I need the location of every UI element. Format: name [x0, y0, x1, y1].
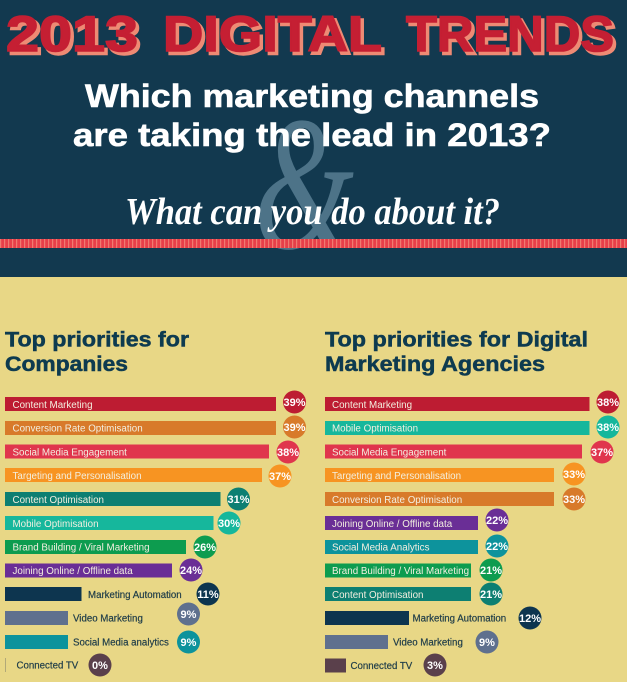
bar: connected tv 3%	[325, 654, 446, 676]
heading: agencies: Top priorities for Digital	[325, 328, 588, 352]
bar: content optimisation 21%: 21%	[480, 589, 502, 601]
heading: question: Which marketing channels	[85, 78, 539, 114]
bar: conversion rate optimisation 33%: 33%	[563, 494, 585, 506]
subheading: script question: What can you do about it?	[125, 191, 500, 233]
bar: mobile optimisation 38%: Mobile Optimisation	[332, 424, 418, 434]
bar: video marketing 9%	[325, 630, 498, 654]
bar: joining online offline 22%: Joining Online / Offline data	[332, 519, 453, 530]
bar: content marketing 39%	[5, 390, 306, 414]
bar: content optimisation 31%: 31%	[227, 494, 250, 506]
bar: video marketing 9%: 9%	[181, 609, 197, 621]
title: DIGITAL	[166, 9, 385, 65]
title: TRENDS	[409, 9, 617, 65]
bar: video marketing 9%	[5, 602, 200, 626]
bar: content optimisation 31%	[5, 488, 250, 510]
bar: brand building 26%	[5, 536, 216, 558]
bar: targeting and personalisation 33%: Targeting and Personalisation	[332, 471, 461, 482]
bar: social media engagement 38%: Social Media Engagement	[12, 448, 127, 458]
bar: joining online offline 22%: 22%	[486, 515, 508, 527]
bar: connected tv 0%	[5, 654, 112, 676]
bar: joining online offline 24%	[5, 558, 202, 582]
bar: social media analytics 9%: Social Media analytics	[73, 638, 169, 648]
title: 2013	[6, 6, 138, 62]
bar: social media engagement 37%	[325, 440, 614, 464]
bar: connected tv 3%: 3%	[427, 660, 443, 672]
heading: question: are taking the lead in 2013?	[73, 117, 551, 153]
bar: mobile optimisation 30%: Mobile Optimisation	[12, 519, 99, 530]
bar: targeting and personalisation 33%	[325, 462, 586, 486]
bar: targeting and personalisation 37%: Targeting and Personalisation	[12, 471, 142, 482]
bar: marketing automation 11%: Marketing Automation	[88, 590, 182, 601]
bar: joining online offline 24%: Joining Online / Offline data	[12, 566, 133, 577]
heading: agencies	[325, 328, 588, 376]
bar: conversion rate optimisation 39%: Conversion Rate Optimisation	[12, 424, 143, 434]
bar: marketing automation 11%	[5, 582, 220, 606]
bar: marketing automation 12%: Marketing Automation	[412, 614, 506, 624]
title: 2013	[9, 9, 141, 65]
panel: header background	[0, 0, 627, 277]
bar: social media analytics 22%: Social Media Analytics	[332, 542, 430, 554]
bar: brand building 26%: 26%	[194, 542, 216, 554]
bar: social media engagement 37%: Social Media Engagement	[332, 448, 447, 458]
title: TRENDS	[406, 6, 614, 62]
bar: joining online offline 24%: 24%	[180, 565, 202, 577]
bar: connected tv 0%: 0%	[92, 660, 108, 672]
heading: companies: Top priorities for	[5, 328, 189, 352]
bar: mobile optimisation 38%: 38%	[597, 422, 619, 434]
bar: connected tv 3%: Connected TV	[350, 661, 413, 672]
bar: social media analytics 22%: 22%	[486, 541, 508, 553]
bar: conversion rate optimisation 39%: 39%	[283, 422, 306, 434]
bar: targeting and personalisation 37%: 37%	[269, 471, 291, 483]
heading: agencies: Marketing Agencies	[325, 353, 545, 376]
bar: social media analytics 22%	[325, 534, 508, 558]
bar: marketing automation 12%	[325, 606, 542, 630]
bar: video marketing 9%: Video Marketing	[393, 638, 463, 648]
bar: marketing automation 12%: 12%	[519, 613, 541, 625]
bar: content optimisation 21%: Content Optimisation	[332, 590, 423, 601]
heading: companies: Companies	[5, 353, 128, 376]
title: DIGITAL	[163, 6, 382, 62]
bar: social media analytics 9%: 9%	[181, 637, 197, 649]
bar: mobile optimisation 30%	[5, 512, 240, 534]
bar: targeting and personalisation 33%: 33%	[563, 469, 585, 481]
bar: content optimisation 21%	[325, 582, 502, 606]
bar: social media engagement 38%: 38%	[277, 447, 299, 459]
icon: large ampersand: &	[254, 77, 354, 290]
bar: video marketing 9%: 9%	[479, 637, 495, 649]
bar: content marketing 38%: 38%	[597, 397, 619, 409]
bar: mobile optimisation 38%	[325, 416, 620, 438]
bar: conversion rate optimisation 33%	[325, 488, 586, 510]
panel: agencies	[325, 328, 620, 676]
striped divider	[0, 239, 627, 248]
panel: yellow chart background	[0, 277, 627, 682]
bar: social media engagement 37%: 37%	[591, 447, 613, 459]
bar: video marketing 9%: Video Marketing	[73, 614, 143, 624]
bar: mobile optimisation 30%: 30%	[218, 518, 240, 530]
bar: content marketing 39%: 39%	[283, 397, 306, 409]
bar: brand building 21%: 21%	[480, 565, 502, 577]
bar: brand building 21%	[325, 558, 502, 582]
bar: brand building 21%: Brand Building / Viral Marketing	[332, 566, 469, 577]
bar: social media engagement 38%	[5, 440, 300, 464]
title	[6, 6, 617, 65]
bar: targeting and personalisation 37%	[5, 464, 292, 488]
bar: content optimisation 31%: Content Optimisation	[12, 495, 104, 506]
bar: content marketing 38%: Content Marketing	[332, 400, 412, 411]
bar: content marketing 39%: Content Marketing	[12, 400, 93, 411]
bar: conversion rate optimisation 33%: Conversion Rate Optimisation	[332, 495, 462, 506]
bar: content marketing 38%	[325, 390, 620, 414]
heading: question	[73, 78, 551, 153]
panel: companies	[5, 328, 306, 676]
heading: companies	[5, 328, 189, 376]
bar: conversion rate optimisation 39%	[5, 416, 306, 438]
bar: social media analytics 9%	[5, 630, 200, 654]
bar: brand building 26%: Brand Building / Viral Marketing	[12, 542, 150, 554]
bar: joining online offline 22%	[325, 508, 508, 532]
bar: marketing automation 11%: 11%	[197, 589, 219, 601]
bar: connected tv 0%: Connected TV	[16, 660, 79, 672]
